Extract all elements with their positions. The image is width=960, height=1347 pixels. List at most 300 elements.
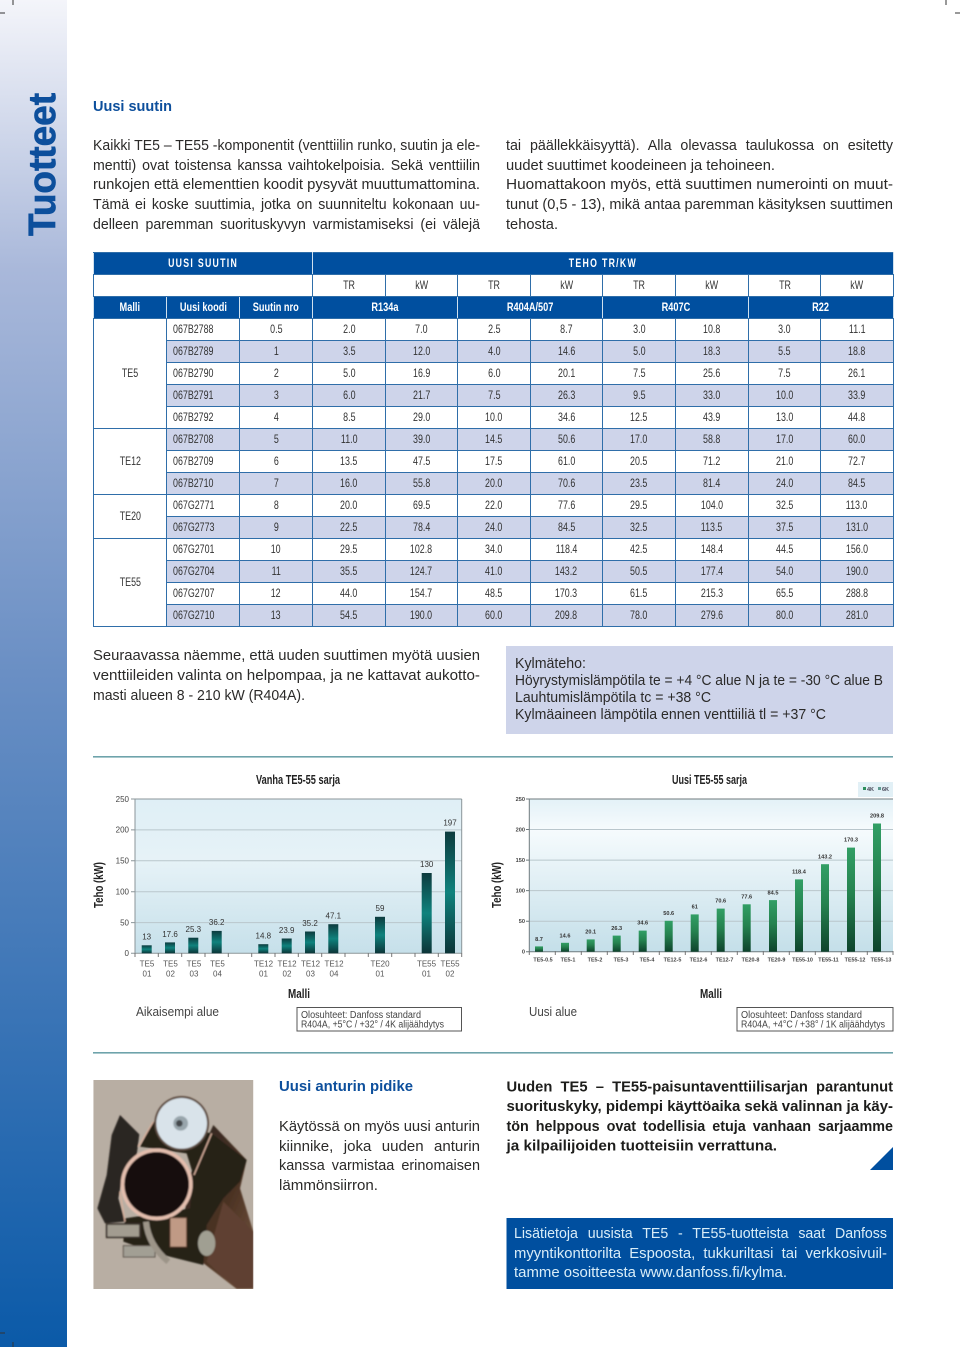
table rows: 20.0 bbox=[340, 498, 358, 512]
table header: TEHO TR/KW bbox=[569, 258, 637, 270]
panel: more information: Lisätietoja uusista TE5 - TE55-tuotteista saat Danfoss bbox=[514, 1226, 887, 1242]
table rows: 067B2709 bbox=[173, 454, 214, 468]
bar values: 61 bbox=[692, 904, 698, 910]
bars bbox=[535, 824, 881, 952]
table header bbox=[94, 253, 893, 318]
table rows: 37.5 bbox=[776, 520, 793, 534]
bar values: 20.1 bbox=[585, 930, 596, 936]
x axis labels: TE20 bbox=[370, 960, 390, 969]
table header: TR bbox=[779, 278, 790, 292]
table rows: 60.0 bbox=[485, 608, 503, 622]
table rows: 13.0 bbox=[776, 410, 793, 424]
y axis labels: 250 bbox=[116, 795, 130, 804]
table rows: 177.4 bbox=[701, 564, 723, 578]
table rows bbox=[119, 322, 893, 626]
table rows: 20.5 bbox=[630, 454, 648, 468]
table rows: 113.0 bbox=[846, 498, 868, 512]
x axis title: Malli bbox=[288, 987, 310, 1001]
table rows: 10.8 bbox=[703, 322, 721, 336]
table rows: 12.5 bbox=[630, 410, 648, 424]
table rows: 067G2707 bbox=[173, 586, 214, 600]
bar values: 50.6 bbox=[663, 911, 674, 917]
x axis labels: 01 bbox=[259, 970, 268, 979]
table header: TR bbox=[488, 278, 500, 292]
table rows: 0.5 bbox=[270, 322, 282, 336]
table rows: 131.0 bbox=[846, 520, 868, 534]
panel: more information: tamme osoitteesta www.danfoss.fi/kylma. bbox=[514, 1265, 787, 1281]
table rows: 2 bbox=[274, 366, 278, 380]
table rows: 21.7 bbox=[413, 388, 430, 402]
x axis labels: 01 bbox=[422, 970, 431, 979]
table rows: 113.5 bbox=[701, 520, 723, 534]
panel: more information bbox=[506, 1218, 893, 1289]
table rows: 61.5 bbox=[630, 586, 648, 600]
table rows: 11 bbox=[271, 564, 281, 578]
text: sensor clamp: kanssa varmistaa erinomaisen bbox=[279, 1158, 480, 1174]
panel: cooling capacity conditions: Kylmäteho: bbox=[515, 656, 586, 672]
table rows: 25.6 bbox=[703, 366, 721, 380]
bold summary: tön helppous ovat todellisia etuja vanhaan sarjaamme bbox=[506, 1119, 893, 1135]
table rows: 6.0 bbox=[343, 388, 355, 402]
table rows: 2.5 bbox=[488, 322, 500, 336]
table rows: 17.0 bbox=[630, 432, 648, 446]
intro text column right bbox=[506, 138, 894, 233]
table rows: 7 bbox=[274, 476, 278, 490]
heading: Uusi anturin pidike: Uusi anturin pidike bbox=[279, 1078, 413, 1095]
table rows: 7.5 bbox=[778, 366, 791, 380]
table rows: 067B2792 bbox=[173, 410, 214, 424]
panel: cooling capacity conditions: Lauhtumislämpötila tc = +38 °C bbox=[515, 690, 711, 706]
bar values: 197 bbox=[443, 819, 457, 828]
x axis labels: 02 bbox=[283, 970, 292, 979]
table rows: 067G2701 bbox=[173, 542, 214, 556]
bar values: 209.8 bbox=[870, 814, 884, 820]
table rows: 7.0 bbox=[415, 322, 428, 336]
table rows: 22.0 bbox=[485, 498, 503, 512]
table rows: 10 bbox=[271, 542, 281, 556]
x axis labels: TE20-9 bbox=[768, 958, 785, 964]
table rows: 067B2790 bbox=[173, 366, 214, 380]
text: sensor clamp: Käytössä on myös uusi anturin bbox=[279, 1119, 480, 1135]
bar values: 14.8 bbox=[256, 932, 272, 940]
table rows: 067B2791 bbox=[173, 388, 214, 402]
table rows: 81.4 bbox=[703, 476, 721, 490]
table rows: 13.5 bbox=[340, 454, 358, 468]
table rows: 279.6 bbox=[701, 608, 723, 622]
x axis labels: TE5-1 bbox=[561, 958, 575, 964]
table rows: 34.6 bbox=[558, 410, 575, 424]
table rows: 61.0 bbox=[558, 454, 575, 468]
table rows: 067B2710 bbox=[173, 476, 214, 490]
table rows: 77.6 bbox=[558, 498, 575, 512]
x axis labels: TE55-12 bbox=[845, 958, 865, 964]
intro text column left bbox=[93, 138, 481, 233]
bar values: 59 bbox=[376, 904, 385, 913]
range caption: Uusi alue bbox=[529, 1005, 577, 1019]
table rows: 32.5 bbox=[776, 498, 793, 512]
bar values: 84.5 bbox=[768, 890, 778, 896]
table rows: 44.8 bbox=[848, 410, 866, 424]
table rows: 170.3 bbox=[555, 586, 578, 600]
text below table bbox=[93, 648, 480, 704]
bar values: 47.1 bbox=[326, 912, 342, 920]
table header: TR bbox=[633, 278, 645, 292]
y axis labels: 200 bbox=[116, 826, 130, 834]
table rows: 3.0 bbox=[633, 322, 645, 336]
x axis labels: TE55-11 bbox=[818, 958, 839, 964]
y axis labels bbox=[516, 797, 525, 956]
table header: Uusi koodi bbox=[179, 302, 227, 314]
table header: Malli bbox=[120, 302, 140, 314]
table rows: 18.8 bbox=[848, 344, 866, 358]
x axis labels: TE55 bbox=[417, 960, 437, 969]
table header: R134a bbox=[371, 302, 399, 314]
legend bbox=[858, 782, 893, 797]
x axis labels: TE55-10 bbox=[792, 958, 813, 964]
conditions box bbox=[297, 1008, 462, 1031]
table rows: 156.0 bbox=[846, 542, 868, 556]
x axis labels: TE5 bbox=[163, 960, 178, 969]
table rows: 148.4 bbox=[701, 542, 723, 556]
x axis labels: 03 bbox=[190, 970, 199, 979]
table rows: 29.5 bbox=[630, 498, 648, 512]
bar values: 70.6 bbox=[715, 898, 726, 904]
text: sensor clamp: kiinnike, joka uuden anturin bbox=[279, 1139, 480, 1155]
x axis title: Malli bbox=[700, 987, 722, 1001]
text below table: masti alueen 8 - 210 kW (R404A). bbox=[93, 688, 305, 704]
panel: cooling capacity conditions: Kylmäaineen lämpötila ennen venttiiliä tl = +37 °C bbox=[515, 707, 826, 723]
x axis labels: 02 bbox=[446, 970, 455, 979]
table rows: 5 bbox=[274, 432, 278, 446]
x axis labels: TE12 bbox=[277, 960, 297, 969]
table rows: 067G2710 bbox=[173, 608, 214, 622]
y axis labels: 0 bbox=[125, 949, 130, 958]
table rows: 39.0 bbox=[413, 432, 430, 446]
table rows: 14.5 bbox=[485, 432, 503, 446]
table rows: 17.0 bbox=[776, 432, 793, 446]
x axis labels: 03 bbox=[306, 970, 315, 979]
table rows: 288.8 bbox=[846, 586, 868, 600]
table rows: 143.2 bbox=[555, 564, 578, 578]
plot background bbox=[135, 799, 462, 953]
table rows: 26.3 bbox=[558, 388, 575, 402]
bar values: 8.7 bbox=[535, 937, 543, 943]
icon: blue corner triangle bbox=[870, 1147, 893, 1170]
table rows: 6 bbox=[274, 454, 278, 468]
table rows: 69.5 bbox=[413, 498, 430, 512]
table rows: 154.7 bbox=[410, 586, 433, 600]
table rows: 47.5 bbox=[413, 454, 430, 468]
data table: nozzle capacities bbox=[93, 252, 894, 627]
table rows: 48.5 bbox=[485, 586, 503, 600]
table rows: 23.5 bbox=[630, 476, 648, 490]
bar values: 118.4 bbox=[792, 870, 807, 876]
table rows: 50.5 bbox=[630, 564, 648, 578]
table rows: 067G2704 bbox=[173, 564, 214, 578]
legend: 6K bbox=[882, 787, 889, 793]
table rows: 8 bbox=[274, 498, 278, 512]
table rows: TE20 bbox=[119, 508, 141, 522]
table rows: 44.0 bbox=[340, 586, 358, 600]
x axis labels: TE55 bbox=[440, 960, 460, 969]
table rows: 24.0 bbox=[485, 520, 503, 534]
table rows: 33.0 bbox=[703, 388, 721, 402]
table rows: 14.6 bbox=[558, 344, 575, 358]
table rows: 5.0 bbox=[633, 344, 645, 358]
photo: sensor clamp on copper pipe bbox=[93, 1080, 253, 1289]
table rows: 21.0 bbox=[776, 454, 793, 468]
x axis labels: TE5 bbox=[210, 960, 225, 969]
table rows: 9.5 bbox=[633, 388, 645, 402]
intro text column right: tai päällekkäisyyttä). Alla olevassa taulukossa on esitetty bbox=[506, 138, 894, 154]
intro text column right: tunut (0,5 - 13), mikä antaa paremman käsityksen suuttimen bbox=[506, 197, 893, 213]
table header: kW bbox=[851, 278, 863, 292]
table rows: 35.5 bbox=[340, 564, 358, 578]
table rows: 10.0 bbox=[776, 388, 793, 402]
table rows: 16.9 bbox=[413, 366, 430, 380]
table rows: 44.5 bbox=[776, 542, 793, 556]
bar values: 23.9 bbox=[279, 926, 295, 935]
table rows: 29.0 bbox=[413, 410, 430, 424]
bar values: 13 bbox=[142, 932, 152, 942]
table rows: 17.5 bbox=[485, 454, 503, 468]
conditions box bbox=[737, 1008, 893, 1031]
table header: UUSI SUUTIN bbox=[168, 258, 238, 270]
table rows: 4.0 bbox=[488, 344, 500, 358]
table rows: 9 bbox=[274, 520, 278, 534]
bar values: 14.6 bbox=[560, 934, 570, 940]
table rows: 5.5 bbox=[778, 344, 791, 358]
table rows: 067G2771 bbox=[173, 498, 214, 512]
range caption: Aikaisempi alue bbox=[136, 1005, 219, 1019]
intro text column right: tehosta. bbox=[506, 217, 558, 233]
text: sensor clamp bbox=[279, 1119, 480, 1194]
table rows: 29.5 bbox=[340, 542, 358, 556]
x axis labels: 02 bbox=[166, 970, 175, 979]
bold summary: Uuden TE5 – TE55-paisuntaventtiilisarjan parantunut bbox=[506, 1080, 893, 1096]
y axis labels: 50 bbox=[519, 919, 525, 925]
table rows: TE5 bbox=[122, 366, 138, 380]
table rows: 2.0 bbox=[343, 322, 355, 336]
chart: old TE5-55 series bbox=[92, 773, 462, 1031]
y axis labels: 100 bbox=[516, 888, 525, 894]
table rows: 18.3 bbox=[703, 344, 721, 358]
table rows: 11.1 bbox=[849, 322, 865, 336]
bar values bbox=[535, 814, 884, 943]
bar values: 25.3 bbox=[186, 925, 202, 934]
x axis labels: TE5 bbox=[187, 960, 202, 969]
table rows: 58.8 bbox=[703, 432, 721, 446]
table rows: 70.6 bbox=[558, 476, 575, 490]
table rows: 8.5 bbox=[343, 410, 355, 424]
table rows: 54.5 bbox=[340, 608, 358, 622]
table rows: 12 bbox=[271, 586, 281, 600]
table rows: 124.7 bbox=[410, 564, 433, 578]
bar values: 35.2 bbox=[302, 919, 318, 928]
table rows: 80.0 bbox=[776, 608, 793, 622]
y axis labels: 250 bbox=[516, 797, 525, 803]
bold summary: suorituskyky, pidempi käyttöaika sekä valinnan ja käy- bbox=[506, 1099, 893, 1115]
table rows: 102.8 bbox=[410, 542, 433, 556]
bold summary bbox=[505, 1080, 893, 1154]
conditions box: R404A, +5°C / +32° / 4K alijäähdytys bbox=[301, 1020, 444, 1030]
table rows: 16.0 bbox=[340, 476, 358, 490]
conditions box: Olosuhteet: Danfoss standard bbox=[301, 1010, 421, 1021]
x axis labels: TE12-6 bbox=[690, 958, 707, 964]
table rows: 78.4 bbox=[413, 520, 430, 534]
table rows: 067B2708 bbox=[173, 432, 214, 446]
table rows: 3.0 bbox=[778, 322, 791, 336]
bar values: 77.6 bbox=[741, 894, 752, 900]
table rows: 84.5 bbox=[558, 520, 575, 534]
table rows: 32.5 bbox=[630, 520, 648, 534]
table rows: 34.0 bbox=[485, 542, 503, 556]
bar values: 143.2 bbox=[818, 854, 832, 860]
x axis labels: 04 bbox=[330, 970, 339, 979]
bar values bbox=[142, 819, 457, 942]
panel: cooling capacity conditions: Höyrystymislämpötila te = +4 °C alue N ja te = -30 °C alue B bbox=[515, 673, 883, 689]
bar values: 130 bbox=[420, 860, 434, 869]
table rows: 7.5 bbox=[633, 366, 645, 380]
text: sensor clamp: lämmönsiirron. bbox=[279, 1178, 378, 1194]
table rows: 067B2789 bbox=[173, 344, 214, 358]
table rows: 5.0 bbox=[343, 366, 355, 380]
table rows: 42.5 bbox=[630, 542, 648, 556]
y axis labels: 150 bbox=[116, 856, 130, 866]
table rows: 78.0 bbox=[630, 608, 648, 622]
bar values: 36.2 bbox=[209, 918, 225, 927]
table rows: 7.5 bbox=[488, 388, 500, 402]
table rows: 71.2 bbox=[703, 454, 721, 468]
x axis labels: TE5-0.5 bbox=[533, 958, 553, 964]
table rows: TE55 bbox=[119, 574, 141, 588]
table rows: 60.0 bbox=[848, 432, 866, 446]
x axis labels: TE5-3 bbox=[614, 958, 628, 964]
table header: kW bbox=[706, 278, 718, 292]
table rows: 55.8 bbox=[413, 476, 430, 490]
y axis labels: 100 bbox=[116, 888, 130, 896]
table rows: 12.0 bbox=[413, 344, 430, 358]
table header: Suutin nro bbox=[253, 302, 299, 314]
sidebar title: Tuotteet bbox=[22, 93, 64, 236]
panel: more information: myyntikonttorilta Espoosta, tukkuriltasi tai verkkosivuil- bbox=[514, 1246, 887, 1262]
chart: new TE5-55 series bbox=[490, 773, 893, 1031]
y axis labels: 150 bbox=[516, 858, 525, 864]
x axis labels: 01 bbox=[376, 970, 385, 979]
x axis labels: TE12 bbox=[301, 960, 321, 969]
bold summary: ja kilpailijoiden tuotteisiin verrattuna. bbox=[505, 1138, 777, 1154]
intro text column left: delleen paremman suorituskyvyn varmistamiseksi (ei välejä bbox=[93, 217, 481, 233]
table rows: 50.6 bbox=[558, 432, 575, 446]
table rows: 43.9 bbox=[703, 410, 721, 424]
bar values: 34.6 bbox=[637, 920, 648, 926]
table rows: 8.7 bbox=[560, 322, 573, 336]
table rows: 3 bbox=[274, 388, 278, 402]
table rows: 190.0 bbox=[410, 608, 433, 622]
y axis labels bbox=[116, 795, 130, 958]
x axis labels: TE5 bbox=[140, 960, 155, 969]
chart title: Uusi TE5-55 sarja bbox=[672, 773, 748, 787]
table rows: 54.0 bbox=[776, 564, 793, 578]
x axis labels: 01 bbox=[143, 970, 152, 979]
table rows: 118.4 bbox=[556, 542, 577, 556]
table header: kW bbox=[560, 278, 573, 292]
intro text column right: Huomattakoon myös, että suuttimen numerointi on muut- bbox=[506, 177, 893, 193]
table rows: 10.0 bbox=[485, 410, 503, 424]
y axis title: Teho (kW) bbox=[92, 862, 106, 908]
legend: 4K bbox=[867, 787, 874, 793]
sidebar bbox=[0, 0, 67, 1347]
x axis labels: 04 bbox=[213, 970, 222, 979]
table rows: 41.0 bbox=[485, 564, 503, 578]
intro text column left: Kaikki TE5 – TE55 -komponentit (venttiilin runko, suutin ja ele- bbox=[93, 138, 480, 154]
table rows: 3.5 bbox=[343, 344, 355, 358]
table header: R407C bbox=[661, 302, 690, 314]
x axis labels: TE5-2 bbox=[588, 958, 602, 964]
table rows: 215.3 bbox=[701, 586, 723, 600]
intro text column left: Tämä ei koske suuttimia, jotka on suunniteltu kokonaan uu- bbox=[93, 197, 480, 213]
table rows: 1 bbox=[274, 344, 278, 358]
x axis labels bbox=[533, 958, 891, 964]
table rows: 65.5 bbox=[776, 586, 793, 600]
table rows: 22.5 bbox=[340, 520, 358, 534]
table header: R404A/507 bbox=[507, 302, 553, 314]
table rows: 26.1 bbox=[848, 366, 866, 380]
table rows: 33.9 bbox=[848, 388, 866, 402]
y axis labels: 200 bbox=[516, 828, 525, 834]
conditions box: Olosuhteet: Danfoss standard bbox=[741, 1010, 862, 1021]
x axis labels: TE12-7 bbox=[716, 958, 733, 964]
table rows: 72.7 bbox=[848, 454, 866, 468]
table header: TR bbox=[343, 278, 355, 292]
x axis labels: TE55-13 bbox=[871, 958, 891, 964]
table rows: 067B2788 bbox=[173, 322, 214, 336]
y axis labels: 50 bbox=[120, 918, 130, 928]
chart title: Vanha TE5-55 sarja bbox=[256, 773, 341, 787]
y axis labels: 0 bbox=[522, 950, 525, 956]
y axis title: Teho (kW) bbox=[490, 862, 504, 908]
plot background bbox=[529, 799, 893, 952]
bar values: 170.3 bbox=[844, 838, 858, 844]
x axis labels: TE12 bbox=[254, 960, 274, 969]
intro text column right: uudet suuttimet koodeineen ja tehoineen. bbox=[506, 158, 775, 174]
table rows: 4 bbox=[274, 410, 278, 424]
table rows: 11.0 bbox=[341, 432, 357, 446]
x axis labels: TE20-8 bbox=[742, 958, 759, 964]
table rows: 20.1 bbox=[558, 366, 575, 380]
bars bbox=[142, 832, 455, 953]
x axis labels: TE5-4 bbox=[640, 958, 654, 964]
table rows: 281.0 bbox=[846, 608, 868, 622]
bar values: 26.3 bbox=[611, 926, 622, 932]
table rows: 209.8 bbox=[555, 608, 578, 622]
text below table: Seuraavassa näemme, että uuden suuttimen myötä uusien bbox=[93, 648, 480, 664]
table rows: 067G2773 bbox=[173, 520, 214, 534]
table rows: TE12 bbox=[119, 454, 141, 468]
heading: Uusi suutin: Uusi suutin bbox=[93, 98, 172, 115]
x axis labels bbox=[140, 960, 460, 979]
x axis labels: TE12-5 bbox=[664, 958, 681, 964]
table header: R22 bbox=[813, 302, 829, 314]
text below table: venttiileiden valinta on helpompaa, ja ne kattavat aukotto- bbox=[93, 668, 480, 684]
conditions box: R404A, +4°C / +38° / 1K alijäähdytys bbox=[741, 1020, 885, 1030]
panel: cooling capacity conditions bbox=[506, 646, 893, 734]
table rows: 24.0 bbox=[776, 476, 793, 490]
table rows: 13 bbox=[271, 608, 281, 622]
table rows: 84.5 bbox=[848, 476, 866, 490]
intro text column left: mentti) ovat toistensa kanssa vaihtokelpoisia. Sekä venttiilin bbox=[93, 158, 480, 174]
table rows: 104.0 bbox=[701, 498, 723, 512]
